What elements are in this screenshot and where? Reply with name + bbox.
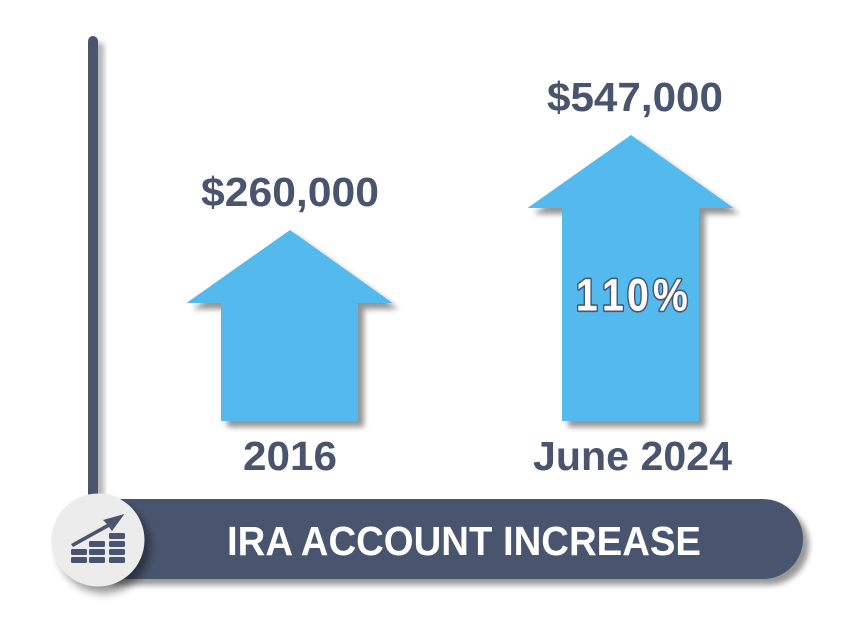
arrow: 2016 [186, 230, 398, 427]
title banner [106, 499, 809, 585]
icon: growth chart badge [52, 494, 150, 593]
arrow: June 2024 [528, 135, 740, 427]
vertical axis line [88, 36, 104, 500]
value label: 2016: $260,000 [201, 169, 379, 215]
icon: stacked bars [71, 533, 125, 563]
icon: rising arrow [71, 514, 124, 547]
year label: 2016: 2016 [243, 433, 337, 479]
value label: June 2024: $547,000 [547, 74, 723, 120]
percentage increase label: 110% [576, 270, 688, 320]
year label: June 2024: June 2024 [533, 433, 732, 479]
banner title: IRA ACCOUNT INCREASE [227, 518, 701, 564]
